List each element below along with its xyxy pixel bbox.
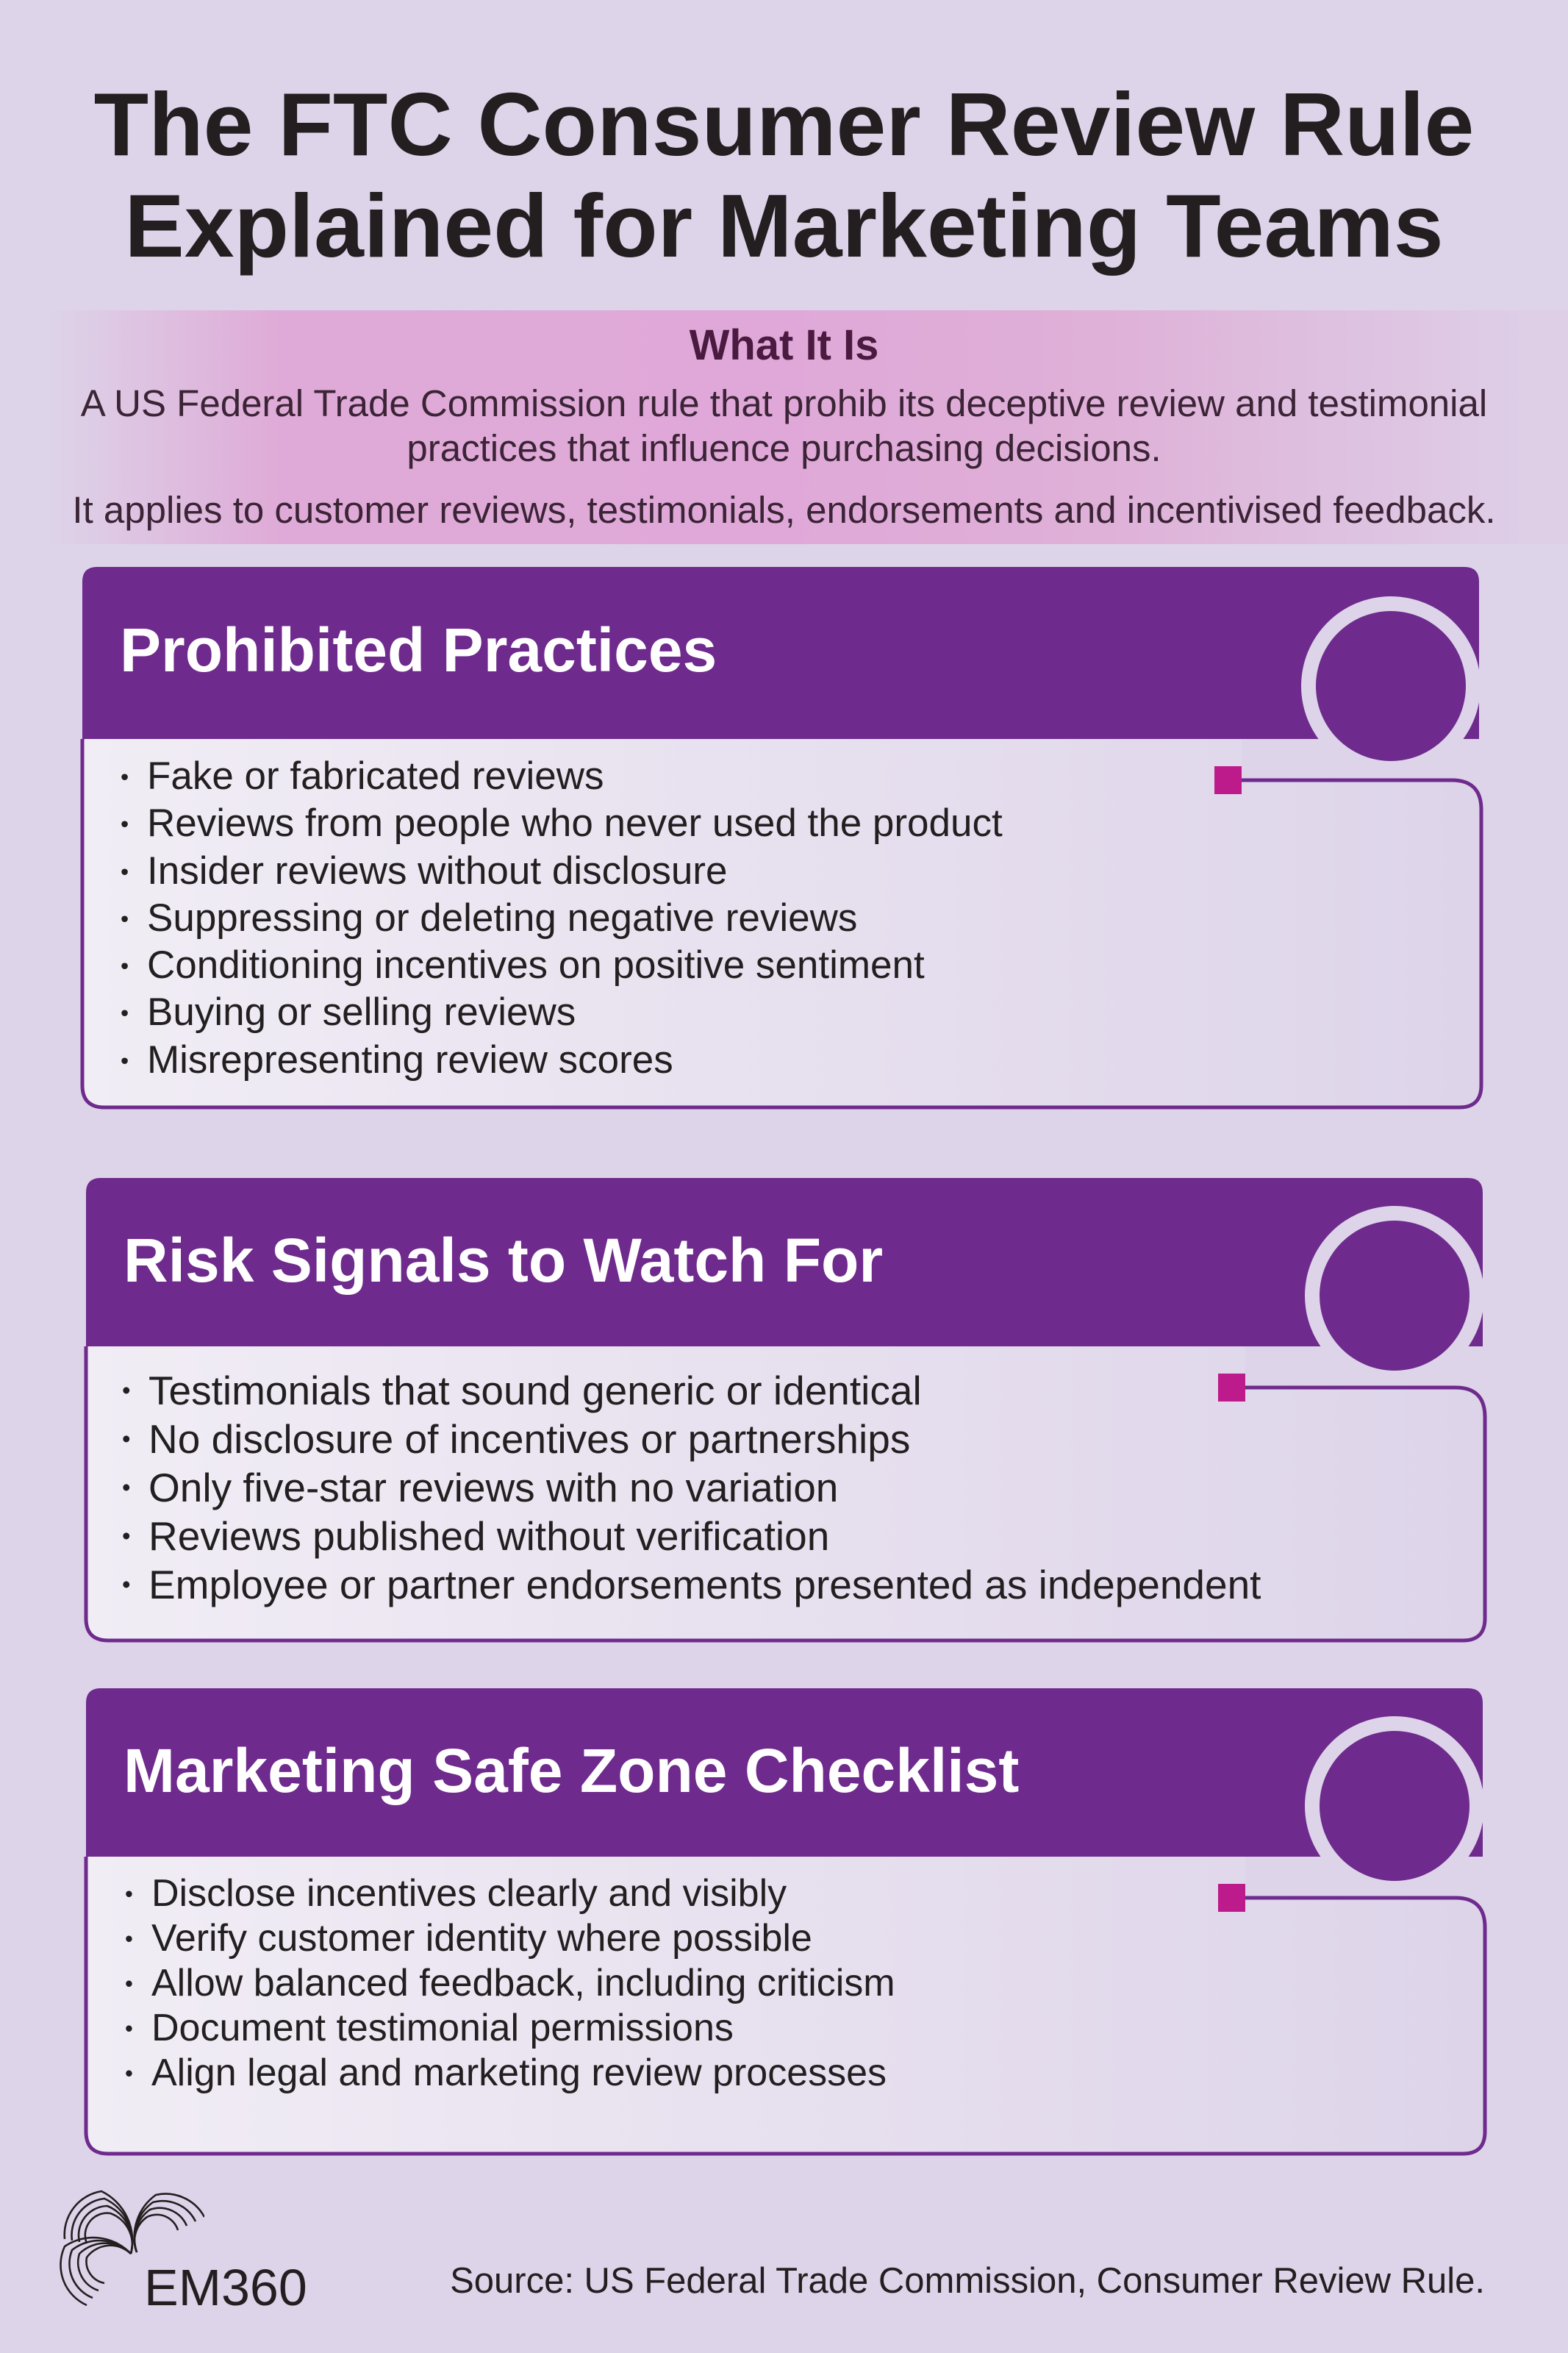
- panel: what it is: [0, 310, 1568, 544]
- title: [94, 74, 1474, 276]
- list: checklist: Document testimonial permissions: [151, 2007, 734, 2049]
- text block: scope: It applies to customer reviews, testimonials, endorsements and incentivised feedback.: [72, 489, 1496, 531]
- list: checklist: [126, 1872, 895, 2094]
- text: EM360: EM360: [144, 2259, 307, 2316]
- list: prohibited practices: Insider reviews without disclosure: [147, 849, 727, 893]
- heading: safe zone checklist: Marketing Safe Zone Checklist: [123, 1736, 1019, 1805]
- heading: what it is: What It Is: [690, 321, 878, 369]
- text block: definition: practices that influence purchasing decisions.: [407, 427, 1161, 469]
- list: risk signals: No disclosure of incentives or partnerships: [148, 1416, 910, 1462]
- list: checklist: Allow balanced feedback, including criticism: [151, 1962, 895, 2004]
- list: checklist: Align legal and marketing review processes: [151, 2052, 887, 2094]
- list: prohibited practices: [121, 754, 1003, 1082]
- source note: Source: US Federal Trade Commission, Consumer Review Rule.: [450, 2261, 1485, 2301]
- list: checklist: Verify customer identity where possible: [151, 1917, 812, 1960]
- list: risk signals: Employee or partner endorsements presented as independent: [148, 1562, 1261, 1607]
- list: prohibited practices: Fake or fabricated reviews: [147, 754, 604, 798]
- list: prohibited practices: Suppressing or deleting negative reviews: [147, 896, 857, 940]
- text block: definition: [81, 382, 1487, 469]
- heading: prohibited practices: Prohibited Practices: [120, 615, 717, 685]
- text block: definition: A US Federal Trade Commission rule that prohib its deceptive review and testimonial: [81, 382, 1487, 424]
- list: prohibited practices: Misrepresenting review scores: [147, 1038, 673, 1082]
- panel: prohibited practices: [81, 567, 1483, 1109]
- panel: risk signals: [84, 1178, 1486, 1643]
- list: prohibited practices: Reviews from people who never used the product: [147, 801, 1003, 845]
- logo: EM360: [60, 2190, 307, 2316]
- panel: safe zone checklist: [84, 1688, 1486, 2156]
- list: risk signals: Reviews published without verification: [148, 1513, 829, 1559]
- title: Explained for Marketing Teams: [124, 176, 1444, 276]
- list: risk signals: Testimonials that sound generic or identical: [148, 1368, 922, 1413]
- heading: risk signals: Risk Signals to Watch For: [123, 1226, 883, 1295]
- list: checklist: Disclose incentives clearly and visibly: [151, 1872, 787, 1915]
- list: prohibited practices: Buying or selling reviews: [147, 990, 576, 1034]
- title: The FTC Consumer Review Rule: [94, 74, 1474, 174]
- list: prohibited practices: Conditioning incentives on positive sentiment: [147, 943, 925, 987]
- list: risk signals: [123, 1368, 1261, 1607]
- list: risk signals: Only five-star reviews with no variation: [148, 1465, 838, 1510]
